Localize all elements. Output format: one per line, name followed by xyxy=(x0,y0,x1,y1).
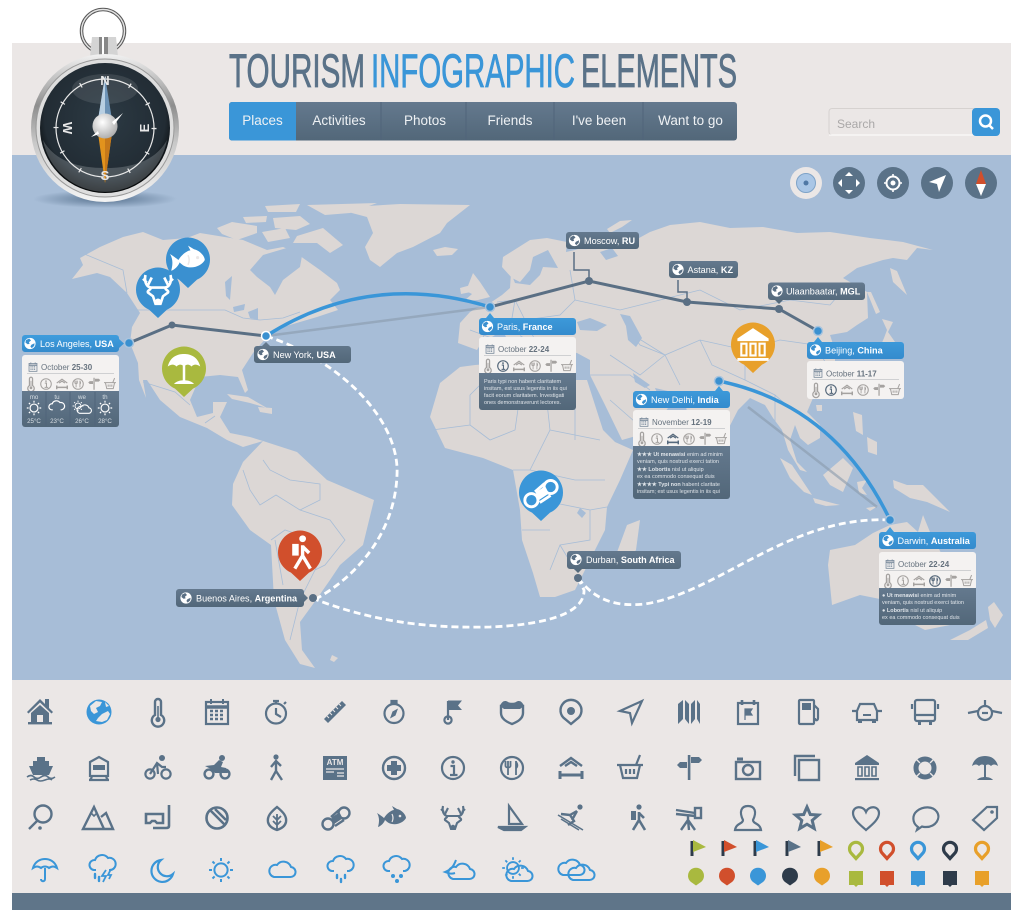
icon: flag xyxy=(444,700,462,724)
icon: event xyxy=(738,700,758,724)
icon: camera xyxy=(736,759,760,779)
panel: world map xyxy=(12,155,1011,680)
label: Darwin with card: Darwin, Australia xyxy=(898,536,971,546)
label: New Delhi with card: insitam; est usus legentis in iis qui xyxy=(637,489,720,495)
label: Darwin with card: ● Ut menawisi enim ad minim xyxy=(882,593,957,599)
label: Paris with card xyxy=(479,313,576,410)
label: New York xyxy=(254,342,351,363)
label: Darwin with card: October 22-24 xyxy=(898,560,950,569)
label: Los Angeles with card: th xyxy=(102,394,108,401)
inland water xyxy=(225,247,650,518)
label: Paris with card: Paris typi non habent claritatem xyxy=(484,379,561,385)
label: Paris with card: Paris, France xyxy=(497,322,553,332)
icon: umbrella xyxy=(33,859,57,881)
label: Paris with card: insitam, est usus legentis in iis qui xyxy=(484,386,567,392)
icon: bicycle xyxy=(145,755,171,779)
continents xyxy=(72,203,1003,668)
icon: ATM xyxy=(323,756,347,780)
icon: shield xyxy=(500,701,524,724)
title: INFOGRAPHIC xyxy=(371,44,575,97)
icon: clouds xyxy=(558,860,595,880)
icon: mountains xyxy=(83,807,113,829)
icon: sun xyxy=(209,858,233,882)
label: New Delhi with card: ex ea commodo consequat duis xyxy=(637,474,715,480)
navigation bar: Want to go xyxy=(658,113,723,128)
icon: train xyxy=(89,757,109,780)
icon: ping pong xyxy=(29,806,52,830)
icon: snow xyxy=(383,856,410,883)
label: New Delhi with card: ★★★★ Typi non habent claritate xyxy=(637,481,720,488)
icon: moon and cloud xyxy=(445,860,475,879)
icon: telescope xyxy=(676,808,701,830)
label: Durban xyxy=(567,551,681,573)
icon: car xyxy=(852,704,882,721)
label: Los Angeles with card: Los Angeles, USA xyxy=(40,339,114,349)
label: Beijing with card: Beijing, China xyxy=(825,346,884,356)
label: New Delhi with card: ★★★ Ut menawisi enim ad minim xyxy=(637,451,723,458)
icon: skier xyxy=(558,804,583,830)
icon: fuel xyxy=(799,700,818,724)
icon: ship xyxy=(27,757,55,781)
label: Durban: Durban, South Africa xyxy=(586,555,676,565)
label: Los Angeles with card xyxy=(22,335,124,427)
label: Los Angeles with card: October 25-30 xyxy=(41,363,93,372)
label: Los Angeles with card: 25°C xyxy=(27,418,41,425)
icon: photo stack xyxy=(795,756,819,780)
icon: info xyxy=(442,757,464,779)
icon: speech bubble xyxy=(913,807,938,830)
icon: home xyxy=(27,699,53,724)
icon: lifebuoy xyxy=(916,759,934,777)
label: Los Angeles with card: tu xyxy=(54,394,60,401)
icon: plane xyxy=(968,700,1002,720)
icon row 1 xyxy=(27,699,1002,727)
compass: S xyxy=(101,168,110,183)
ring pins xyxy=(849,842,989,858)
icon: stopwatch xyxy=(266,701,286,724)
label: Paris with card: ones demonstraverunt lectores. xyxy=(484,400,562,406)
pin: parasol xyxy=(162,347,206,397)
pin: deer xyxy=(136,268,180,318)
icon: rain xyxy=(327,856,354,882)
label: Moscow xyxy=(566,232,639,249)
icon: person xyxy=(735,806,761,830)
label: Ulaanbaatar: Ulaanbaatar, MGL xyxy=(786,286,861,296)
icon: beach parasol xyxy=(972,756,998,780)
navigation bar: Places xyxy=(242,113,283,128)
search box: Search xyxy=(837,117,875,131)
label: Los Angeles with card: 23°C xyxy=(50,418,64,425)
label: New Delhi with card: veniam, quis nostrud exerci tation xyxy=(637,459,719,465)
icon: shopping basket xyxy=(617,755,643,778)
icon: museum xyxy=(855,755,879,780)
label: Astana: Astana, KZ xyxy=(688,265,733,275)
icon: thermometer xyxy=(152,699,164,727)
navigation bar: I've been xyxy=(572,113,626,128)
icon: walker xyxy=(271,754,282,780)
icon: medical xyxy=(383,757,405,779)
icon: globe xyxy=(86,700,112,724)
icon: binoculars xyxy=(322,808,350,830)
label: Los Angeles with card: 26°C xyxy=(75,418,89,425)
label: Buenos Aires xyxy=(176,589,308,607)
label: Los Angeles with card: 28°C xyxy=(98,418,112,425)
label: New Delhi with card xyxy=(633,386,730,499)
route: faint grey shadows xyxy=(266,307,877,507)
label: New Delhi with card: New Delhi, India xyxy=(651,395,720,405)
icon: hotel bed xyxy=(560,758,582,779)
label: Darwin with card: ● Lobortis nisl ut aliquip xyxy=(882,608,942,614)
icon row 4: weather xyxy=(33,855,595,883)
icon: motorcycle xyxy=(205,755,229,778)
compass: E xyxy=(137,123,152,132)
compass xyxy=(31,10,179,208)
icon: snorkel xyxy=(146,805,169,828)
compass: N xyxy=(100,73,110,88)
icon: sun and cloud xyxy=(502,857,533,881)
label: Los Angeles with card: we xyxy=(77,394,87,401)
icon: price tag xyxy=(973,807,997,830)
flags xyxy=(692,840,833,856)
route: dashed white paths xyxy=(266,336,890,627)
label: Paris with card: October 22-24 xyxy=(498,345,550,354)
icon: fish xyxy=(377,806,406,827)
label: Los Angeles with card: mo xyxy=(30,394,39,401)
round pins xyxy=(688,868,830,886)
pin: fish xyxy=(166,238,210,288)
icon: calendar xyxy=(206,699,228,724)
navigation bar: Photos xyxy=(404,113,446,128)
label: Astana xyxy=(669,261,738,278)
label: Paris with card: facit eorum claritatem. Investigati xyxy=(484,393,564,399)
icon: folded map xyxy=(678,700,700,724)
icon: deer xyxy=(441,806,465,829)
icon: storm xyxy=(89,855,116,882)
label: New York: New York, USA xyxy=(273,350,336,360)
icon row 3 xyxy=(29,804,997,830)
icon: cloud xyxy=(269,862,296,877)
country borders xyxy=(82,253,843,640)
icon: restaurant xyxy=(501,757,523,779)
icon: navigation arrow xyxy=(620,701,642,723)
icon: hiker xyxy=(631,804,645,830)
label: Darwin with card: ex ea commodo consequat duis xyxy=(882,615,960,621)
pin: binoculars xyxy=(519,471,563,521)
navigation bar: Friends xyxy=(487,113,533,128)
square pins xyxy=(849,871,989,887)
icon: moon xyxy=(151,860,173,882)
title: ELEMENTS xyxy=(581,44,737,97)
pin: hiker xyxy=(278,531,322,581)
label: Beijing with card xyxy=(807,337,904,399)
label: New Delhi with card: November 12-19 xyxy=(652,418,712,427)
label: Moscow: Moscow, RU xyxy=(584,236,635,246)
icon: map pin xyxy=(560,700,582,724)
pin: museum xyxy=(731,323,775,373)
route: blue flight arcs xyxy=(266,294,890,520)
icon row 2 xyxy=(27,754,998,781)
label: Buenos Aires: Buenos Aires, Argentina xyxy=(196,594,298,604)
route nodes xyxy=(124,277,894,602)
title: TOURISM xyxy=(229,44,365,97)
label: Beijing with card: October 11-17 xyxy=(826,370,877,378)
navigation bar xyxy=(229,102,737,140)
map controls xyxy=(790,167,997,199)
icon: heart xyxy=(853,807,879,830)
icon: bus xyxy=(912,700,938,723)
route: dark connectors xyxy=(129,252,818,343)
icon: leaf xyxy=(268,807,286,830)
icon: signpost xyxy=(677,755,702,780)
icon: sailboat xyxy=(498,806,525,830)
compass: W xyxy=(60,122,75,135)
label: New Delhi with card: ★★ Lobortis nisl ut aliquip xyxy=(637,466,704,473)
icon: star xyxy=(796,807,818,828)
label: Ulaanbaatar xyxy=(768,282,865,304)
icon: compass xyxy=(384,701,404,723)
icon: ruler xyxy=(324,701,346,723)
navigation bar: Activities xyxy=(312,113,366,128)
title xyxy=(229,44,737,97)
icon: ball xyxy=(206,808,228,828)
label: Darwin with card xyxy=(879,527,976,625)
search box xyxy=(829,108,1000,136)
label: Darwin with card: veniam, quis nostrud exerci tation xyxy=(882,600,964,606)
footer bar xyxy=(12,893,1011,910)
